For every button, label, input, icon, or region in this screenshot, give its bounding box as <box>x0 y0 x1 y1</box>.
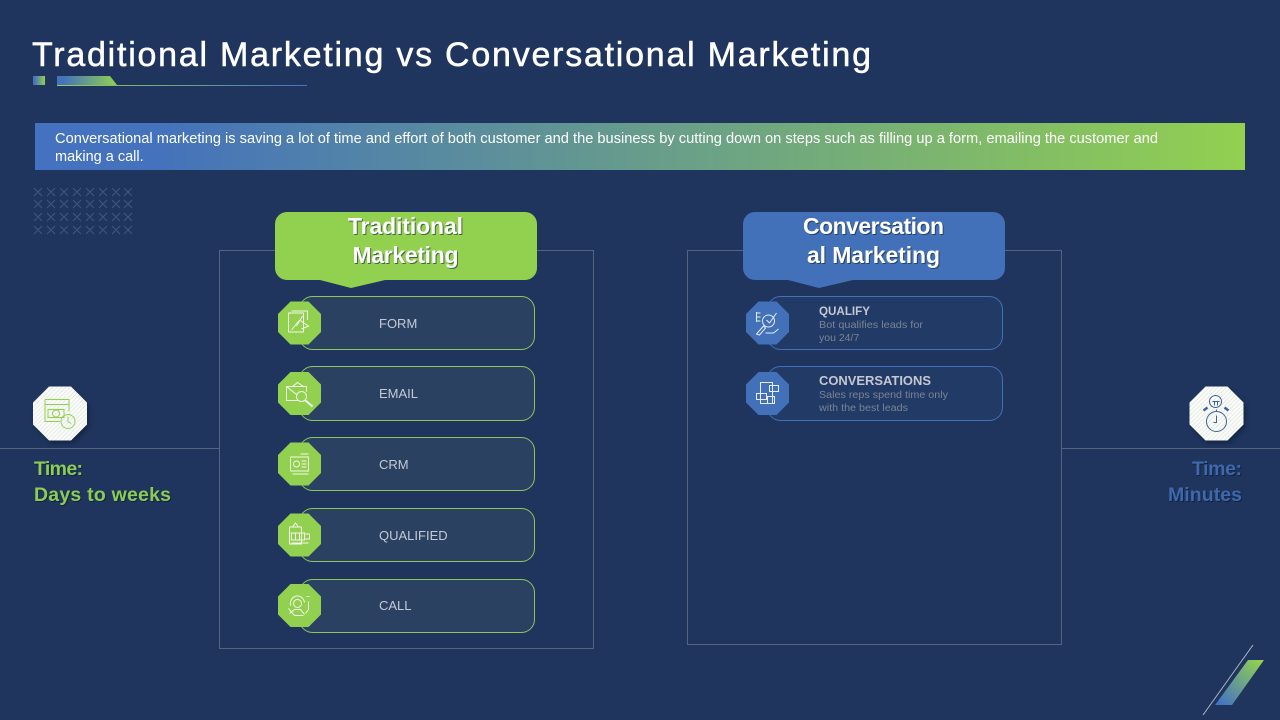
row: conversations: with the best leads <box>818 402 908 414</box>
row: qualify <box>746 296 1002 350</box>
timeline line right <box>1062 448 1280 449</box>
label: conversational time: Time: <box>1192 458 1242 480</box>
row: crm <box>278 438 534 490</box>
icon: stopwatch with bulb <box>1190 386 1244 440</box>
label: traditional time: Time: <box>34 458 83 480</box>
label: traditional time <box>34 458 171 506</box>
decorative cross pattern <box>34 188 132 234</box>
title underline accent <box>33 76 307 86</box>
title: Traditional Marketing vs Conversational Marketing <box>32 36 871 74</box>
heading: conversational marketing <box>743 212 1005 288</box>
row: qualify: Bot qualifies leads for <box>819 319 924 331</box>
row: call <box>278 580 534 632</box>
intro banner <box>35 123 1245 170</box>
row: email: EMAIL <box>379 386 418 401</box>
row: crm: CRM <box>379 457 409 472</box>
label: conversational time: Minutes <box>1168 484 1242 506</box>
row: qualified: QUALIFIED <box>379 528 448 543</box>
panel frame <box>220 250 594 648</box>
row: conversations: Sales reps spend time only <box>819 389 949 401</box>
row: form <box>278 296 534 350</box>
panel frame <box>688 250 1062 644</box>
panel: conversational marketing <box>688 212 1062 644</box>
intro banner: making a call. <box>55 149 144 165</box>
heading: conversational marketing: al Marketing <box>807 242 940 268</box>
row: qualify: QUALIFY <box>819 304 870 318</box>
label: traditional time: Days to weeks <box>34 484 171 506</box>
row: qualified <box>278 508 534 562</box>
corner accent <box>1203 645 1264 715</box>
panel: traditional marketing <box>220 212 594 648</box>
row: form: FORM <box>379 316 417 331</box>
heading: traditional marketing <box>275 212 537 288</box>
row: call: CALL <box>379 598 412 613</box>
timeline line left <box>0 448 219 449</box>
heading: traditional marketing: Traditional <box>348 213 463 239</box>
label: conversational time <box>1168 458 1242 506</box>
row: conversations: CONVERSATIONS <box>819 373 931 388</box>
intro banner: Conversational marketing is saving a lot of time and effort of both customer and the business by cutting down on steps such as filling up a form, emailing the customer and <box>55 131 1158 147</box>
row: email <box>278 366 534 420</box>
row: conversations <box>746 366 1002 420</box>
icon: calendar with clock <box>33 386 87 440</box>
heading: conversational marketing: Conversation <box>803 213 944 239</box>
heading: traditional marketing: Marketing <box>352 242 458 268</box>
row: qualify: you 24/7 <box>819 332 859 344</box>
